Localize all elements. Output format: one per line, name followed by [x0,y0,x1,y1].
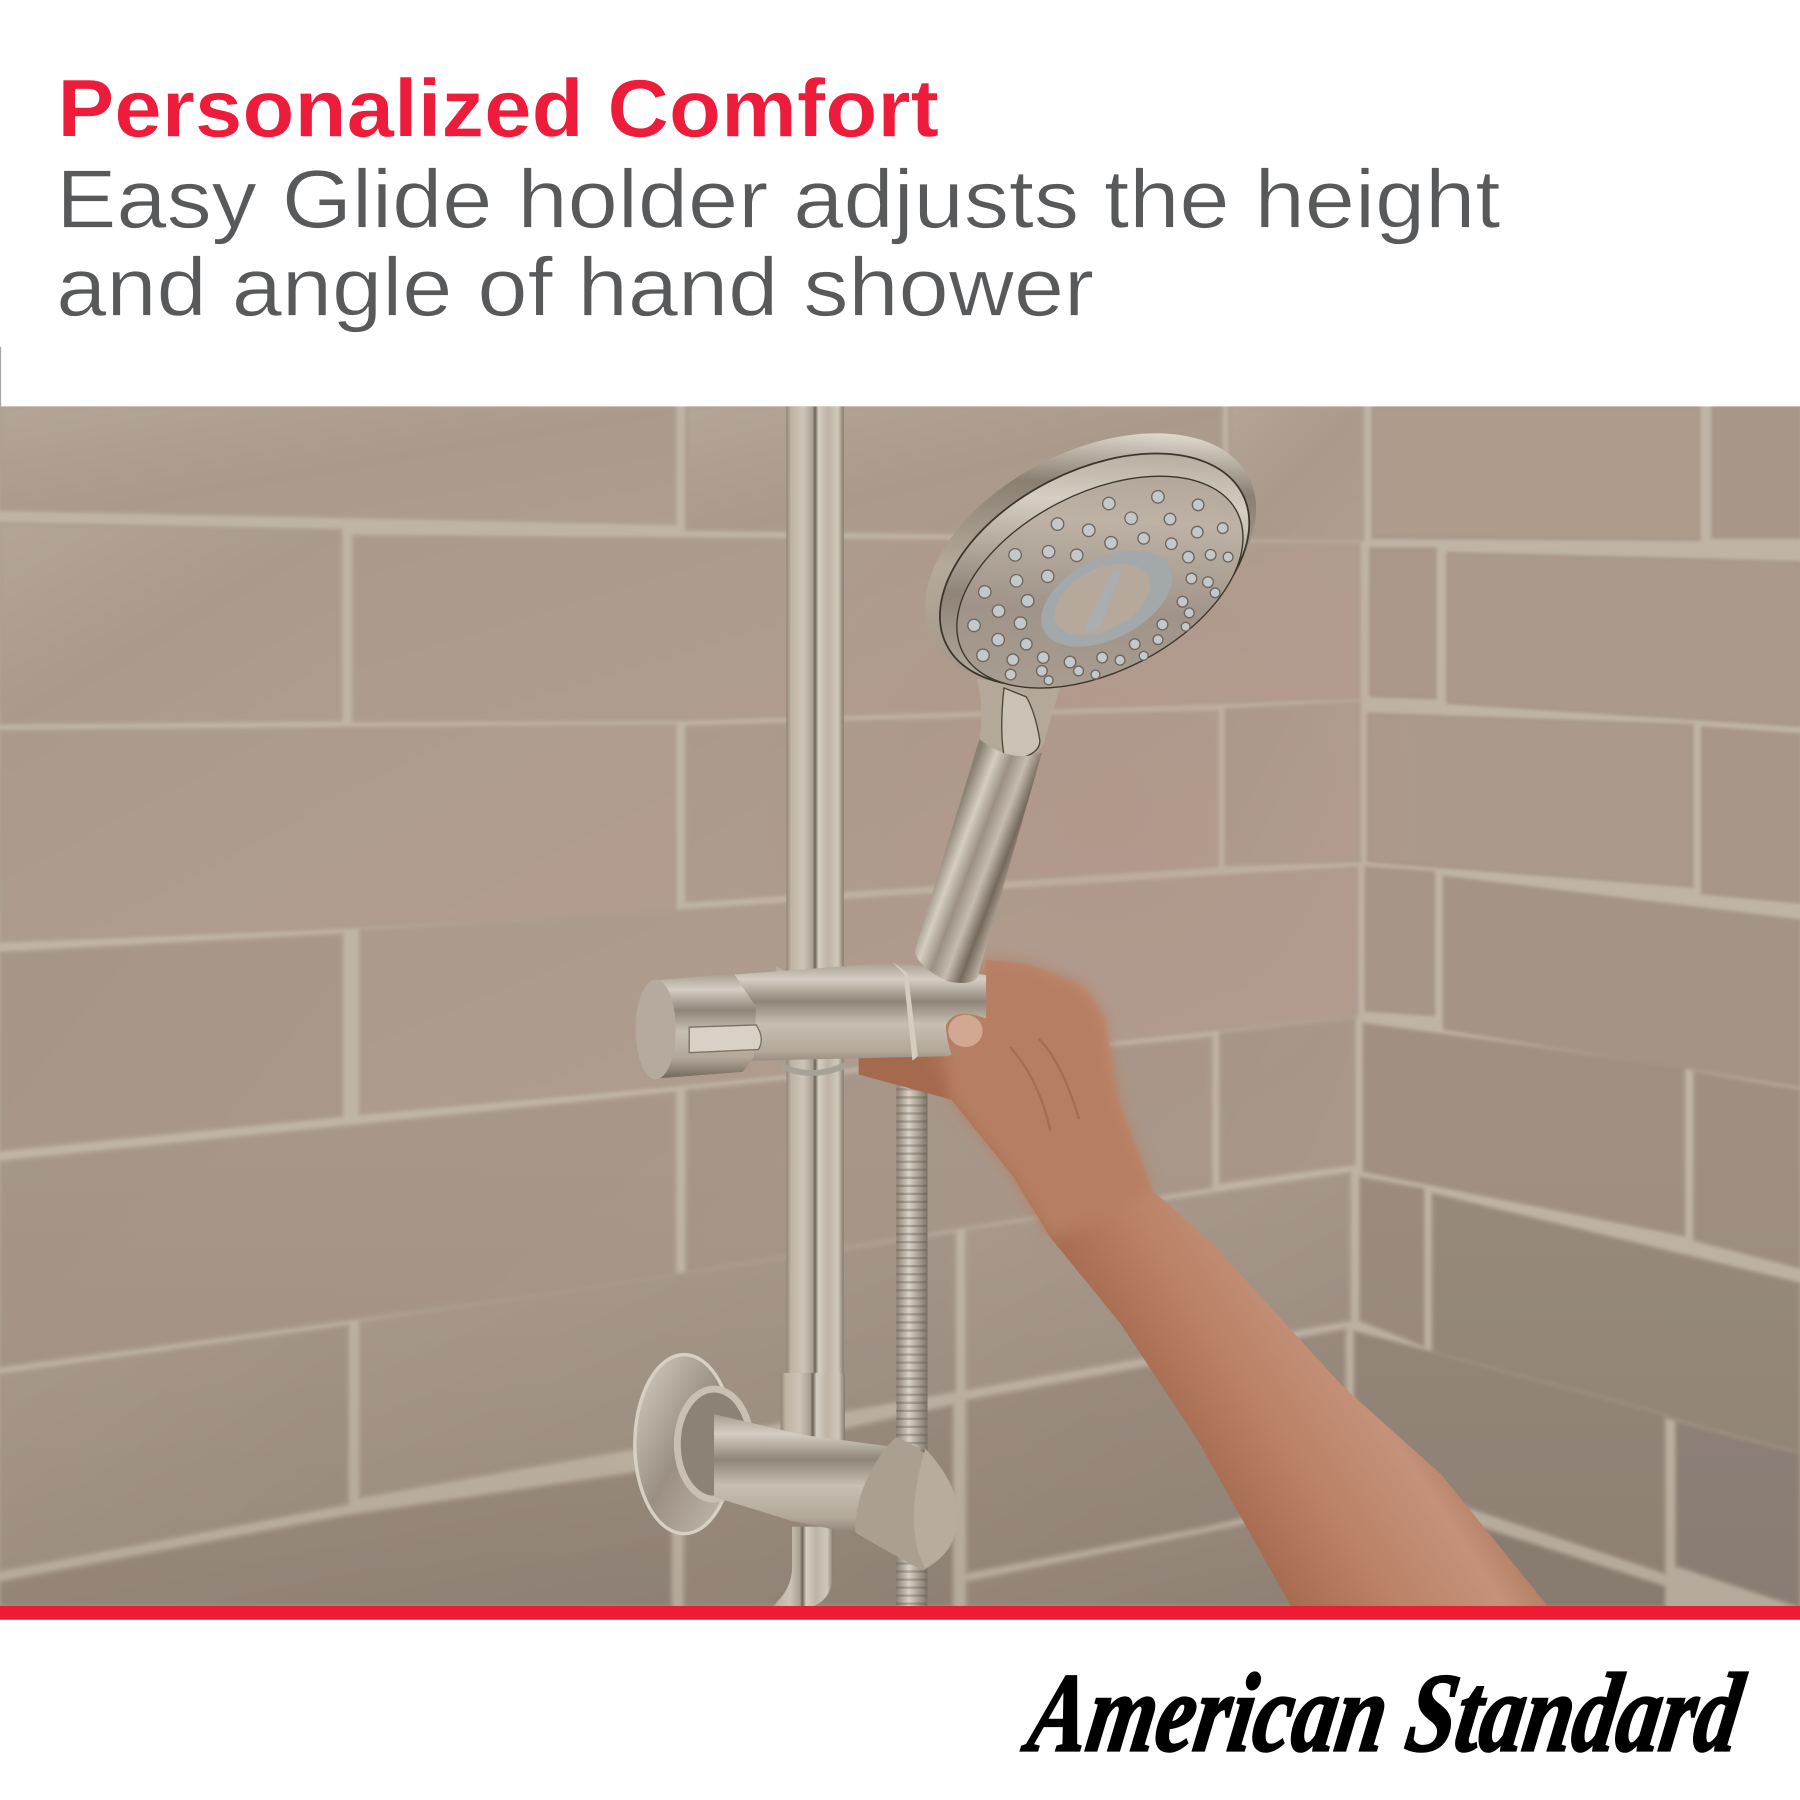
elbow arm [714,1414,888,1529]
wall elbow and valve [635,1355,958,1607]
tile colour wash [723,436,1481,1171]
slide rail [786,406,844,1394]
handle [915,739,1042,983]
subtitle line 1: Easy Glide holder adjusts the height [56,152,1500,245]
forearm and hand, behind holder [859,960,1549,1607]
heading block [56,64,1500,334]
holder cylinder [734,964,986,1060]
subtitle line 2: and angle of hand shower [56,241,1094,334]
hand shower, drawn in crop space [636,433,1256,1080]
spray selector lever [1084,567,1122,631]
red divider bar [0,1606,1800,1620]
thumb over holder [946,1014,1080,1131]
left wall tiles [0,406,1363,1607]
rail gaskets [776,966,784,972]
rail socket [780,1373,845,1440]
flexible hose [897,1056,928,1607]
knob body [656,974,756,1079]
wall flange [635,1355,734,1534]
thumbnail [948,1015,983,1047]
lower rail [771,1527,833,1607]
grout background [0,406,1800,1607]
slide holder [636,962,986,1079]
knob lever [689,1025,761,1053]
rim groove [939,452,1250,684]
nozzles [968,491,1233,685]
photo: shower on tiled wall [0,382,1800,1607]
spray face [956,476,1244,689]
title: Personalized Comfort [57,64,939,155]
right wall tiles [1355,406,1800,1607]
valve knob [855,1437,957,1570]
holder clamp collar [892,962,918,1061]
flange inner ring [677,1389,751,1499]
lower shade [0,1495,1800,1606]
finger creases [1010,1039,1079,1131]
knob end cap [636,979,676,1079]
neck [977,679,1060,759]
head rim [926,433,1256,674]
centre disc [1041,550,1172,646]
